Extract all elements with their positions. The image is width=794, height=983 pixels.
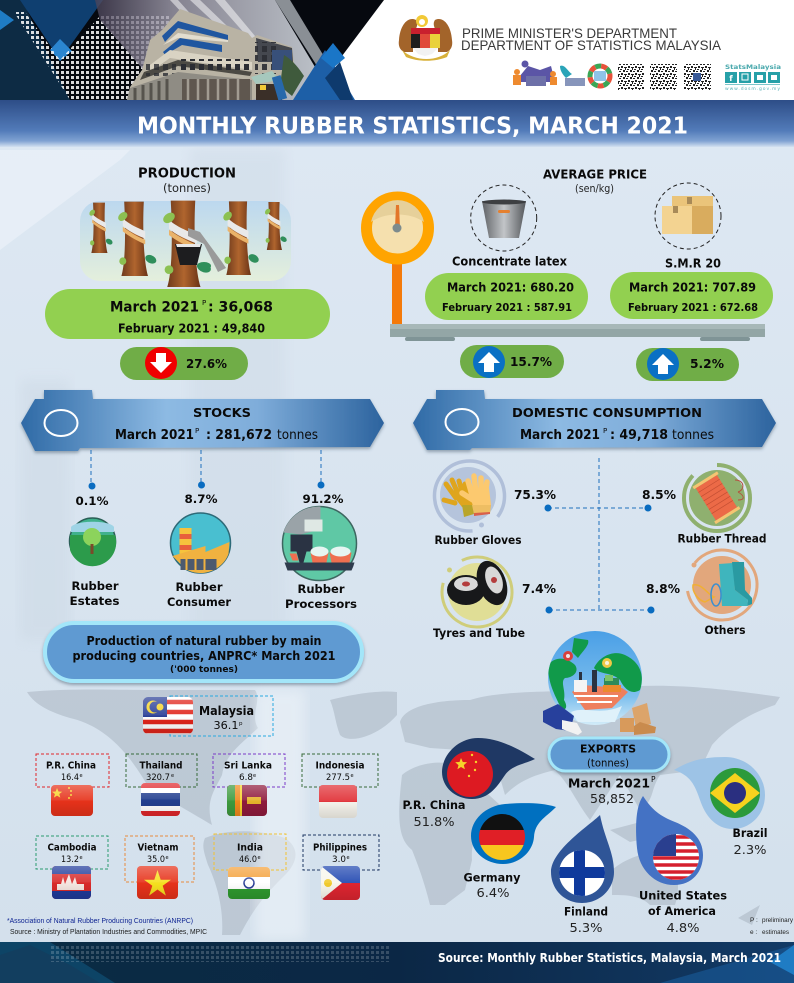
country: Sri Lanka: e (253, 773, 256, 779)
destination: Finland: 5.3% (570, 920, 603, 935)
country: India (214, 834, 286, 899)
heading pill: exports: EXPORTS (580, 742, 636, 756)
heading pill: natural rubber production: producing countries, ANPRC* March 2021 (72, 649, 336, 663)
country: Vietnam: Vietnam (138, 842, 179, 854)
pill: production values: February 2021 : 49,840 (118, 322, 265, 336)
item: rubber consumer: Consumer (167, 595, 231, 609)
heading: department names: PRIME MINISTER'S DEPARTMENT (462, 26, 677, 41)
destination: P.R. China: 51.8% (414, 814, 455, 829)
country: P.R. China: 16.4 (61, 773, 79, 783)
destination: Finland: Finland (564, 904, 608, 918)
item: others: 8.8% (646, 582, 680, 596)
item: rubber estates (70, 494, 120, 608)
destination: Germany: Germany (464, 870, 521, 884)
item: others (646, 536, 771, 637)
country: Sri Lanka: Sri Lanka (224, 760, 272, 772)
world map backdrop (27, 686, 780, 935)
item: S.M.R 20 (610, 256, 773, 319)
banner: domestic consumption (413, 390, 776, 450)
item: rubber thread: Rubber Thread (678, 532, 766, 546)
country: Indonesia: 277.5 (326, 773, 350, 783)
heading: department names (461, 26, 722, 53)
change badge: latex up 15.7%: 15.7% (510, 355, 552, 369)
illustration: rubber trees being tapped (80, 201, 291, 287)
change badge: production down 27.6% (120, 347, 248, 380)
total exports value: 58,852 (590, 791, 634, 806)
country: P.R. China (36, 754, 109, 816)
heading: production (138, 166, 236, 195)
pill: production values: March 2021 (110, 300, 199, 316)
legend: preliminary and estimates (750, 917, 794, 936)
footnote: ANRPC and source (7, 916, 208, 936)
country: Philippines: 3.0 (332, 855, 346, 865)
item: rubber processors: 91.2% (302, 492, 344, 506)
item: S.M.R 20: February 2021 : 672.68 (628, 301, 758, 314)
heading: production: (tonnes) (163, 181, 211, 195)
light streak over map (255, 690, 305, 940)
logos row: www.dosm.gov.my (725, 86, 780, 92)
change badge: latex up 15.7% (460, 345, 564, 378)
heading: production: PRODUCTION (138, 166, 236, 182)
panel: domestic consumption (413, 390, 776, 640)
item: concentrate latex: February 2021 : 587.91 (442, 301, 572, 314)
item: tyres and tube: 7.4% (522, 582, 556, 596)
country: Cambodia: 13.2 (61, 855, 79, 865)
banner: domestic consumption: P (603, 427, 607, 435)
item: S.M.R 20: March 2021: 707.89 (629, 280, 756, 294)
heading pill: natural rubber production: Production of natural rubber by main (86, 634, 322, 648)
country: Cambodia (36, 836, 108, 899)
country: Malaysia: p (239, 721, 243, 727)
total exports value (568, 775, 656, 806)
country: P.R. China: e (80, 773, 83, 779)
item: rubber estates: 0.1% (76, 494, 109, 508)
banner: stocks: : 281,672 (206, 428, 272, 443)
heading pill: natural rubber production: ('000 tonnes) (170, 665, 238, 675)
banner: domestic consumption: : 49,718 (610, 428, 668, 443)
change badge: SMR 20 up 5.2%: 5.2% (690, 357, 724, 371)
total exports value: P (651, 775, 656, 784)
country: P.R. China: P.R. China (46, 760, 96, 772)
footnote: ANRPC and source: *Association of Natural Rubber Producing Countries (ANRPC) (7, 916, 193, 925)
item: rubber estates: Estates (70, 594, 120, 608)
destination: United States of America: of America (648, 904, 716, 918)
icon: globe with ship, truck and boxes (543, 631, 656, 735)
legend: preliminary and estimates: estimates (762, 929, 790, 936)
country: India: e (258, 855, 261, 861)
banner: domestic consumption: tonnes (672, 428, 714, 443)
banner: domestic consumption: DOMESTIC CONSUMPTION (512, 405, 702, 420)
title bar (0, 100, 794, 147)
destination: Brazil: Brazil (732, 826, 768, 840)
panel: production (45, 166, 330, 380)
change badge: SMR 20 up 5.2% (636, 348, 739, 381)
item: rubber processors: Rubber (298, 582, 345, 596)
country: Thailand: e (171, 773, 174, 779)
legend: preliminary and estimates: P : (750, 917, 758, 924)
banner: stocks: March 2021 (115, 428, 194, 443)
item: rubber gloves (432, 458, 556, 547)
panel: stocks (21, 390, 384, 611)
legend: preliminary and estimates: e : (750, 929, 757, 936)
destination: United States of America (636, 796, 727, 935)
country: Sri Lanka: 6.8 (239, 773, 253, 783)
panel: average price (366, 168, 773, 381)
item: concentrate latex (425, 254, 588, 320)
pill: production values: P (202, 299, 206, 307)
connectors: consumption (544, 458, 654, 614)
item: tyres and tube (433, 551, 556, 640)
country: Sri Lanka (213, 754, 285, 816)
country: Thailand: 320.7 (146, 773, 170, 783)
banner: stocks: P (195, 427, 199, 435)
country: Cambodia: Cambodia (48, 842, 96, 854)
destination: P.R. China (402, 738, 535, 829)
item: tyres and tube: Tyres and Tube (433, 626, 525, 640)
heading: average price (543, 168, 647, 195)
country: Malaysia (143, 696, 273, 736)
banner: domestic consumption: March 2021 (520, 428, 600, 443)
item: others: Others (704, 623, 746, 637)
heading: average price: AVERAGE PRICE (543, 168, 647, 182)
item: S.M.R 20: S.M.R 20 (665, 256, 721, 270)
item: rubber estates: Rubber (72, 579, 119, 593)
connectors: stocks (88, 450, 324, 490)
item: rubber processors: Processors (285, 597, 357, 611)
panel: exports (402, 631, 794, 936)
country: Philippines: e (346, 855, 350, 861)
item: rubber thread (642, 465, 766, 546)
item: concentrate latex: March 2021: 680.20 (447, 280, 574, 294)
heading pill: natural rubber production (45, 623, 362, 681)
item: rubber consumer (167, 492, 231, 609)
destination: United States of America: United States (639, 888, 727, 902)
country: Vietnam (125, 836, 194, 899)
item: rubber consumer: Rubber (176, 580, 223, 594)
destination: United States of America: 4.8% (666, 920, 700, 935)
footnote: ANRPC and source: Source : Ministry of Plantation Industries and Commodities, MPIC (10, 927, 208, 936)
banner: stocks: tonnes (277, 428, 318, 443)
country: Philippines: Philippines (313, 842, 367, 854)
item: rubber gloves: 75.3% (514, 488, 556, 502)
pill: production values: : 36,068 (208, 300, 273, 316)
change badge: production down 27.6%: 27.6% (186, 357, 227, 371)
destination: P.R. China: P.R. China (402, 798, 466, 812)
destination: Germany (464, 803, 556, 900)
item: concentrate latex: Concentrate latex (452, 254, 567, 268)
banner: stocks (21, 390, 384, 451)
icon: coat of arms (399, 15, 452, 61)
country: Vietnam: 35.0 (147, 855, 165, 865)
item: rubber consumer: 8.7% (184, 492, 218, 506)
dotted panel (14, 12, 170, 100)
pill: production values (45, 289, 330, 339)
item: rubber thread: 8.5% (642, 488, 676, 502)
item: rubber processors (282, 492, 357, 611)
country: Malaysia: 36.1 (214, 719, 238, 732)
country: Indonesia: e (350, 773, 354, 779)
country: Vietnam: e (166, 855, 169, 861)
heading pill: exports (549, 738, 669, 771)
icon: latex bucket (471, 185, 537, 251)
heading: department names: DEPARTMENT OF STATISTICS MALAYSIA (461, 38, 722, 53)
country: India: India (237, 842, 263, 854)
panel: production by country (7, 623, 379, 936)
footer (0, 942, 794, 983)
heading pill: exports: (tonnes) (587, 758, 629, 770)
country: Indonesia: Indonesia (316, 760, 364, 772)
title bar: MONTHLY RUBBER STATISTICS, MARCH 2021 (137, 112, 688, 140)
country: Indonesia (302, 754, 378, 818)
country: Malaysia: Malaysia (199, 704, 254, 718)
heading: average price: (sen/kg) (575, 183, 614, 195)
header (0, 0, 794, 101)
logos row (513, 60, 781, 92)
country: Thailand (126, 754, 197, 816)
legend: preliminary and estimates: preliminary (762, 917, 794, 924)
country: Cambodia: e (80, 855, 83, 861)
icon: rubber boxes (655, 183, 721, 249)
logos row: f (729, 74, 733, 83)
destination: Brazil: 2.3% (734, 842, 767, 857)
country: India: 46.0 (239, 855, 257, 865)
building (127, 9, 304, 101)
country: Thailand: Thailand (140, 760, 182, 772)
destination: Germany: 6.4% (476, 885, 510, 900)
item: rubber gloves: Rubber Gloves (434, 533, 522, 547)
logos row: StatsMalaysia (725, 63, 781, 71)
country: Philippines (303, 835, 379, 900)
banner: stocks: STOCKS (193, 405, 251, 420)
icon: weighing scale (366, 197, 765, 341)
destination: Finland (551, 815, 614, 935)
destination: Brazil (674, 757, 768, 857)
total exports value: March 2021 (568, 776, 650, 790)
